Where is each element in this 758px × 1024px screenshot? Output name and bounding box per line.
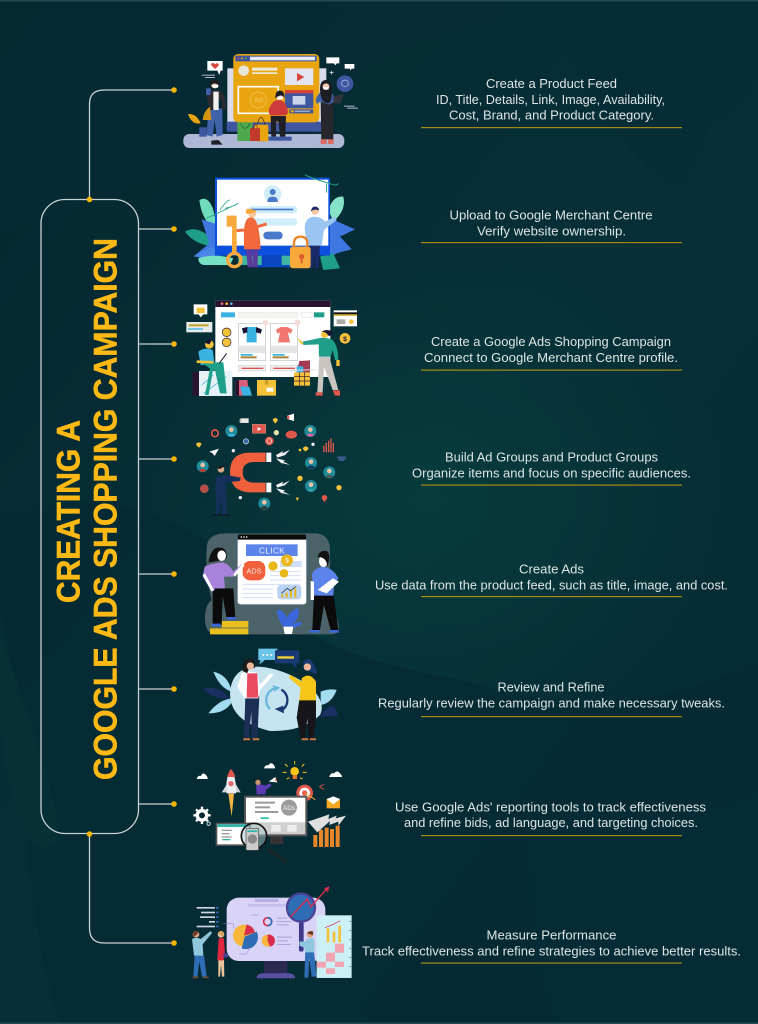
illustration 1: product feed	[183, 54, 358, 148]
woman right	[289, 660, 317, 740]
text 3: shopping campaign	[421, 334, 682, 371]
woman left	[237, 658, 274, 740]
woman	[237, 209, 267, 267]
thumb and rating	[186, 304, 357, 344]
monitor	[244, 796, 307, 844]
text 4: ad groups: Build Ad Groups and Product Groups	[445, 450, 658, 464]
target, mail, arrow	[296, 784, 340, 808]
illustration 3: shopping campaign	[186, 301, 357, 396]
text 6: review and refine: Review and Refine	[498, 680, 604, 694]
avatars	[197, 425, 335, 510]
text 8: measure performance: Measure Performance	[486, 928, 616, 942]
text 4: ad groups	[412, 450, 691, 486]
bulb	[283, 761, 307, 779]
text 3: shopping campaign: Create a Google Ads Shopping Campaign	[431, 334, 671, 349]
text 5: create ads: Use data from the product feed, such as title, image, and cost.	[375, 578, 728, 592]
illustration 2: merchant centre	[185, 175, 355, 270]
list	[197, 907, 219, 927]
text 4: ad groups: Organize items and focus on specific audiences.	[412, 466, 691, 480]
title	[50, 238, 124, 780]
text 5: create ads: Create Ads	[519, 562, 584, 576]
title: GOOGLE ADS SHOPPING CAMPAIGN	[88, 238, 124, 780]
magnifier	[241, 823, 287, 862]
paper chart	[317, 915, 352, 978]
presenter right	[299, 931, 317, 978]
chart	[308, 814, 346, 847]
text 2: merchant centre: Verify website ownership.	[477, 224, 626, 238]
plant	[277, 608, 302, 634]
illustration 4: magnet audience	[196, 414, 347, 515]
text 7: reporting tools: and refine bids, ad language, and targeting choices.	[404, 815, 698, 830]
speech bubbles	[202, 57, 358, 109]
monitor: ADs	[283, 805, 295, 812]
key	[207, 200, 241, 267]
refresh icon	[266, 685, 287, 713]
seated man	[193, 340, 232, 396]
text 7: reporting tools: Use Google Ads' reporting tools to track effectiveness	[395, 800, 707, 814]
box, bags	[236, 380, 276, 396]
text 1: create a product feed: Create a Product Feed	[486, 76, 617, 91]
title: CREATING A	[50, 420, 86, 603]
illustration 7: reporting tools	[193, 761, 346, 862]
lock	[290, 237, 311, 268]
icons	[196, 414, 347, 502]
illustration 1: product feed: Ad	[254, 96, 263, 105]
text 6: review and refine	[378, 680, 725, 717]
illustration 5: create ads: $	[285, 558, 289, 565]
bubbles	[258, 649, 299, 668]
text 1: create a product feed	[421, 76, 682, 128]
text 7: reporting tools	[395, 800, 707, 836]
rocket	[222, 769, 241, 817]
text 2: merchant centre: Upload to Google Merchant Centre	[450, 208, 652, 222]
text 1: create a product feed: Cost, Brand, and Product Category.	[449, 108, 654, 122]
charts on screen	[223, 915, 292, 954]
laptop	[216, 823, 251, 846]
man	[305, 207, 337, 268]
pointing woman	[297, 330, 340, 396]
gear	[193, 807, 211, 825]
person with megaphone	[255, 777, 277, 794]
woman left	[217, 931, 228, 977]
left woman	[188, 79, 226, 145]
cart	[291, 360, 317, 386]
text 2: merchant centre	[421, 208, 682, 243]
businessman	[213, 466, 241, 515]
right woman	[316, 80, 344, 144]
illustration 8: measure performance	[192, 886, 352, 978]
text 1: create a product feed: ID, Title, Details, Link, Image, Availability,	[436, 92, 665, 107]
connector lines and dots	[41, 87, 177, 946]
bags	[237, 117, 268, 141]
illustration 5: create ads	[203, 533, 339, 634]
sparks	[276, 450, 290, 495]
left woman	[203, 547, 248, 634]
man left	[192, 931, 212, 978]
thumb and rating: $	[343, 336, 347, 343]
illustration 5: create ads: CLICK	[259, 545, 285, 555]
text 3: shopping campaign: Connect to Google Merchant Centre profile.	[424, 350, 678, 365]
text 8: measure performance	[362, 928, 741, 964]
seated woman	[269, 91, 288, 137]
illustration 5: create ads: ADS	[246, 567, 262, 576]
text 5: create ads	[375, 562, 728, 597]
right man	[309, 551, 339, 633]
text 6: review and refine: Regularly review the campaign and make necessary tweaks.	[378, 696, 725, 710]
text 8: measure performance: Track effectiveness and refine strategies to achieve better results.	[362, 944, 741, 958]
magnifier with arrow	[287, 886, 329, 952]
illustration 6: review and refine	[203, 649, 338, 740]
